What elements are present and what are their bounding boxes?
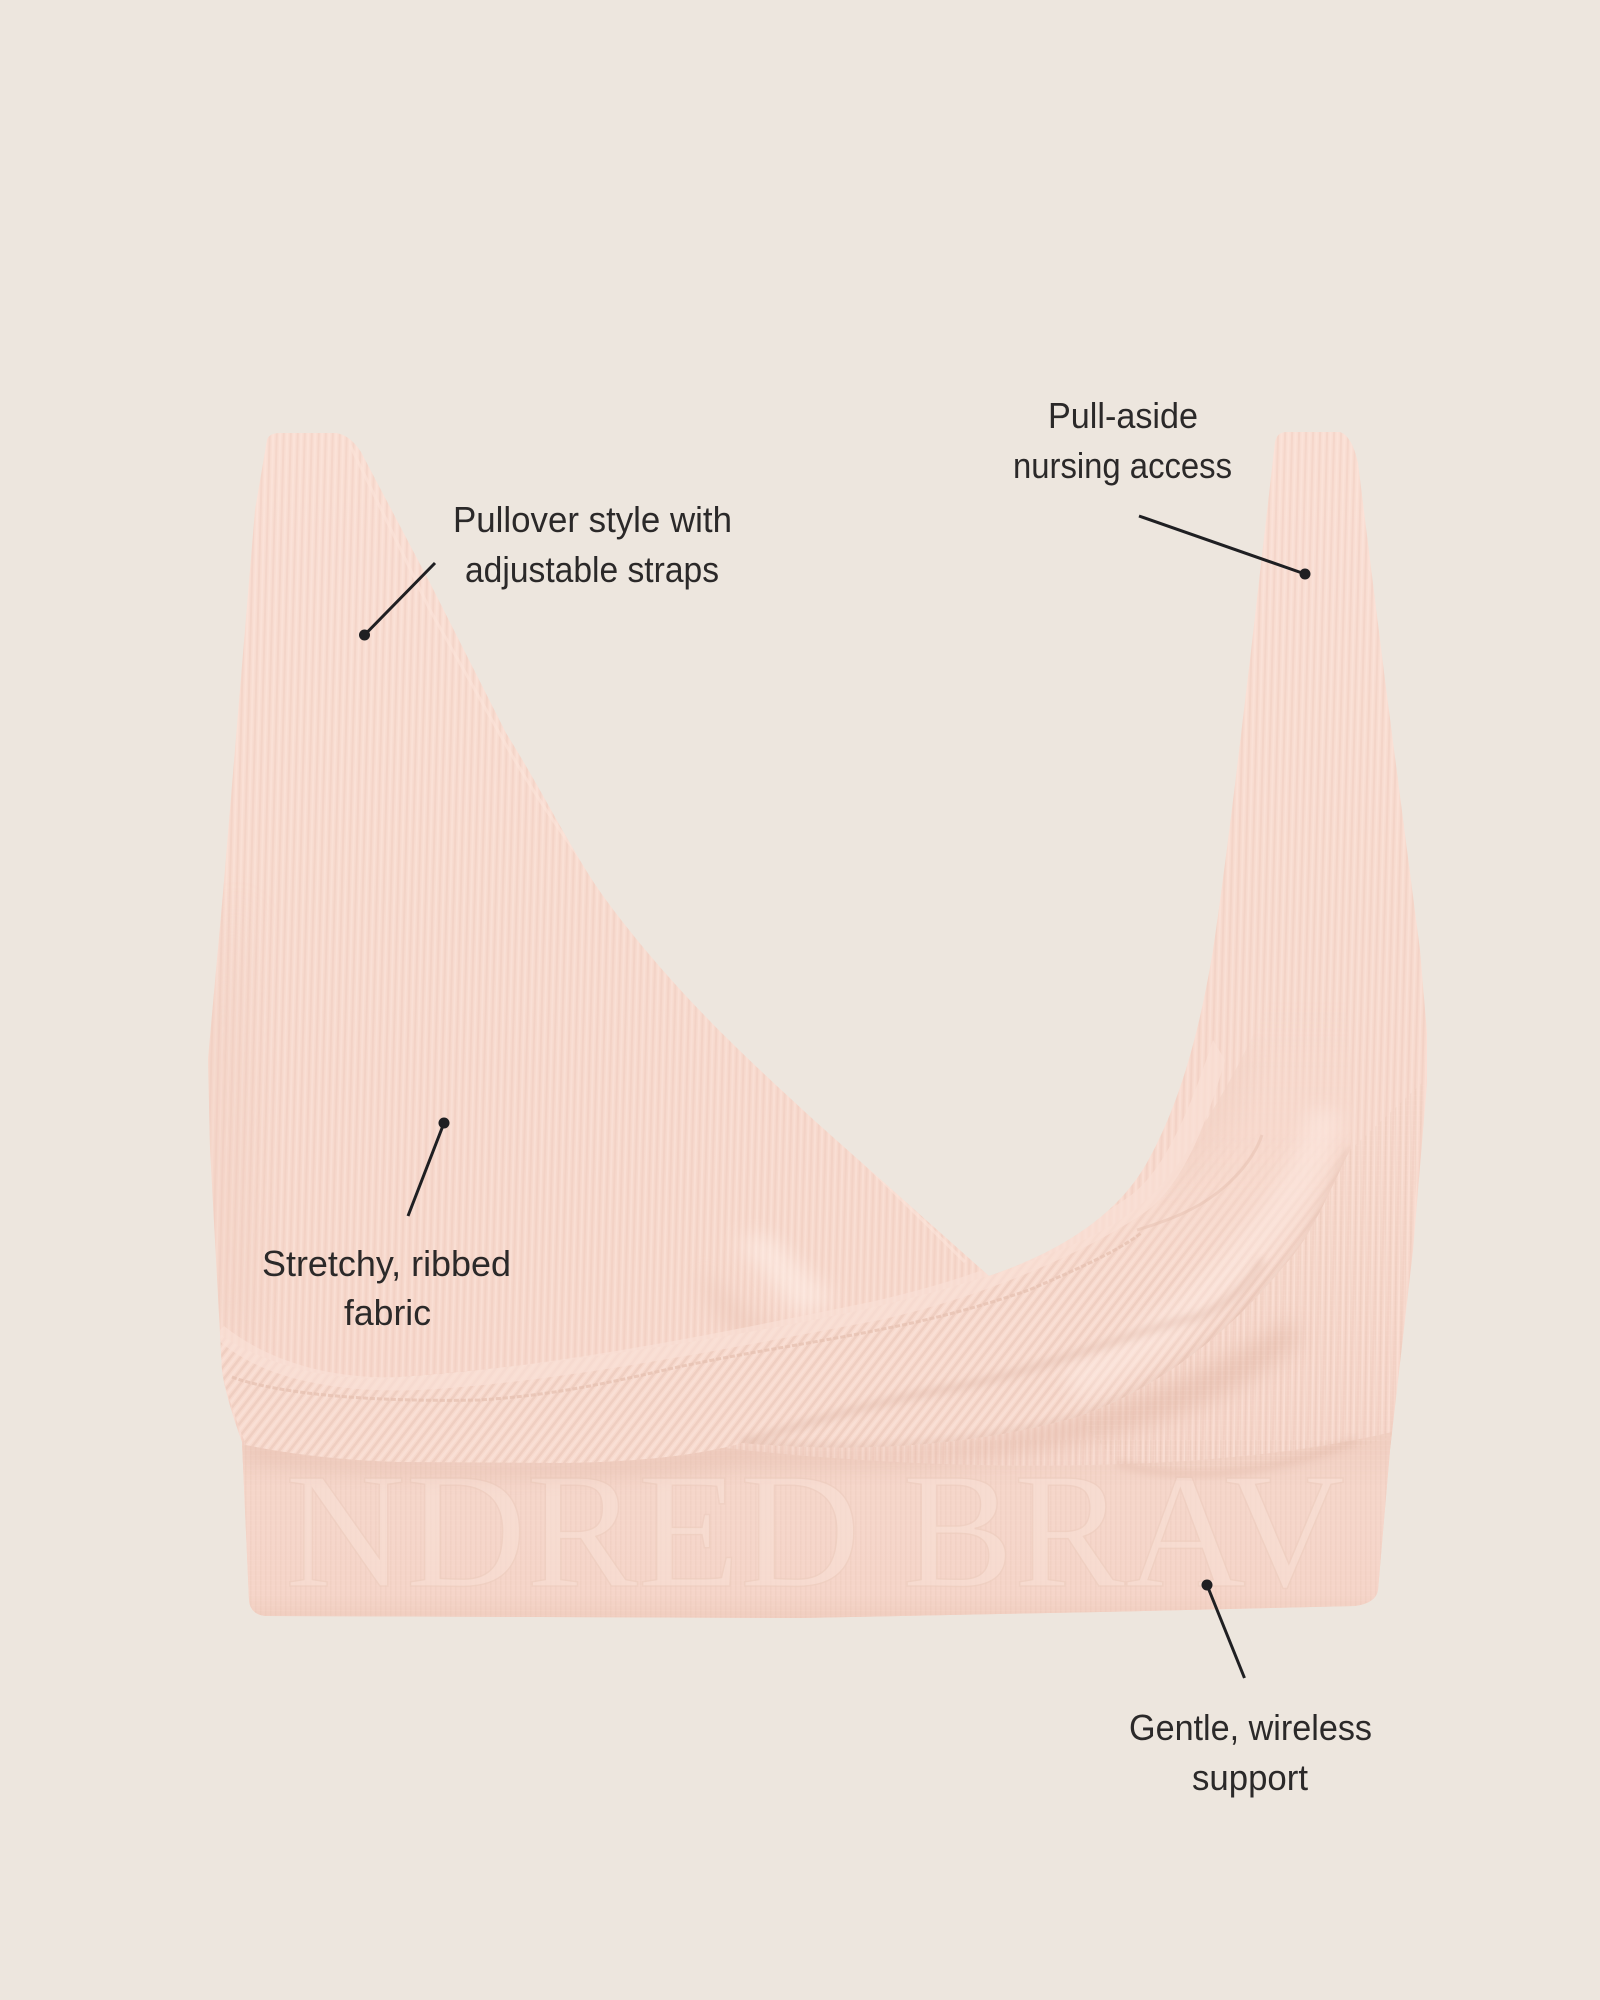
- left edge shade: [200, 900, 260, 1330]
- embossed logo: NDRED BRAV: [285, 1439, 1345, 1622]
- waistband knit: [240, 1440, 1410, 1620]
- wrap fold highlight: [1070, 1110, 1325, 1385]
- callout text: fabric: [344, 1292, 431, 1333]
- wrap panel fill: [224, 1198, 1252, 1463]
- fabric shading and ribs: [200, 430, 1440, 1622]
- callout text: support: [1192, 1757, 1308, 1798]
- right side panel ribs: [1410, 1094, 1411, 1098]
- vertical ribs on cups: [254, 432, 1367, 536]
- callout: adjustable straps: [359, 499, 732, 640]
- shadow under the wrap: [862, 1322, 1295, 1462]
- callout: wireless support: [1129, 1580, 1372, 1798]
- wrap panel: [220, 1060, 1348, 1463]
- left neckline trim: [350, 445, 965, 1262]
- callout: nursing access: [1013, 395, 1310, 580]
- waistband: [240, 1430, 1400, 1620]
- right upper panel shade: [1150, 1040, 1255, 1190]
- inner fold trim line: [1137, 1135, 1262, 1230]
- callout text: [1129, 1707, 1372, 1798]
- callout text: [453, 499, 732, 590]
- cup highlight streak: [744, 1236, 824, 1312]
- outer fold shadow: [742, 1150, 1350, 1448]
- wrap fold shadow: [742, 1260, 1262, 1443]
- callout: ribbed fabric: [262, 1118, 511, 1333]
- cup crease shadow: [718, 1296, 761, 1328]
- leader line and dot: [408, 1118, 450, 1216]
- callout text: [262, 1243, 511, 1333]
- callout text: nursing access: [1013, 445, 1232, 486]
- leader line and dot: [1202, 1580, 1244, 1678]
- leader line and dot: [359, 563, 435, 640]
- callout text: Gentle, wireless: [1129, 1707, 1372, 1748]
- callout text: [1013, 395, 1232, 486]
- callout text: Stretchy, ribbed: [262, 1243, 511, 1284]
- trim stitching: [232, 1233, 1141, 1400]
- callout text: adjustable straps: [465, 549, 719, 590]
- callout text: Pullover style with: [453, 499, 732, 540]
- bra silhouette: [208, 432, 1427, 1618]
- callout text: Pull-aside: [1048, 395, 1198, 436]
- crossover trim: [214, 1040, 1225, 1390]
- leader line and dot: [1139, 516, 1310, 580]
- wrap ribs: [220, 1228, 1298, 1463]
- side seam shadow: [1117, 1440, 1356, 1474]
- bra product illustration: [200, 430, 1440, 1622]
